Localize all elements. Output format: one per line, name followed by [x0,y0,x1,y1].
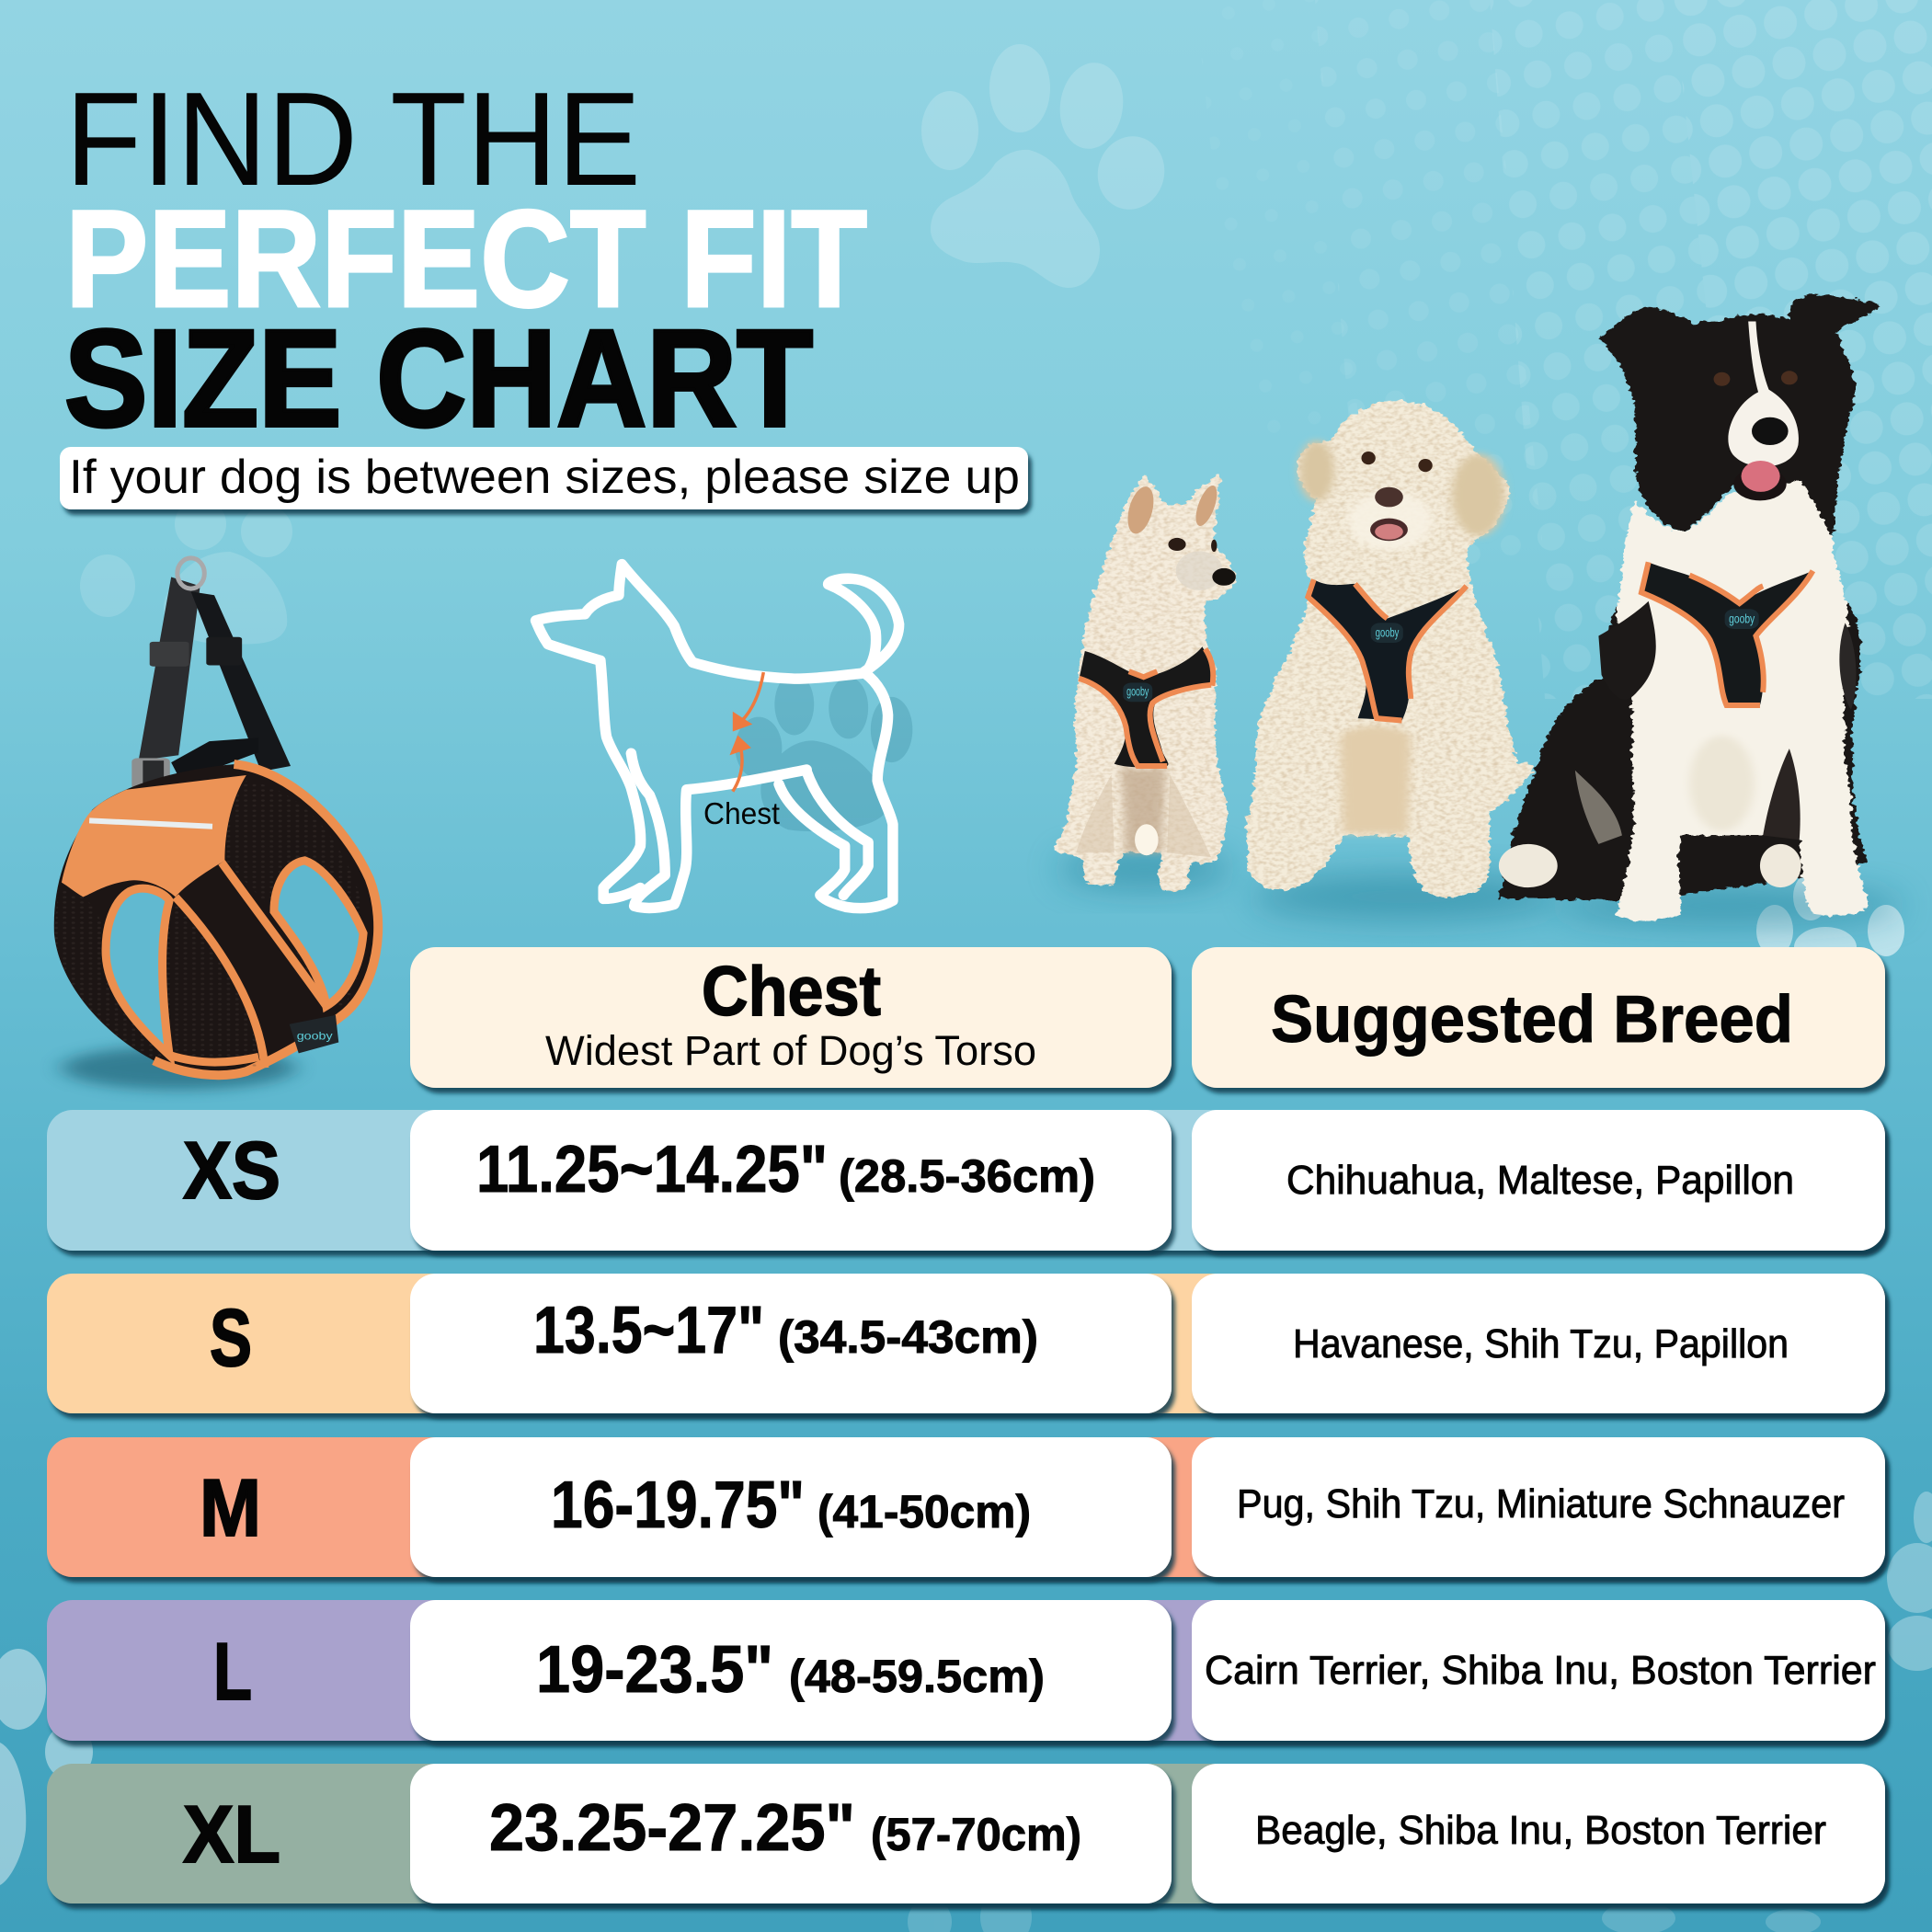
chest diagram label: Chest [703,796,780,830]
row: L [47,1600,1885,1741]
dog silhouette outline [536,565,899,909]
measuring diagram: dog outline [536,565,912,909]
dog: small shiba [1054,474,1237,891]
faint paw inside dog [736,673,912,831]
table header: chest [410,947,1172,1088]
XS size label: XS [183,1125,280,1216]
harness body: gooby [297,1030,333,1042]
S chest cell [410,1274,1172,1413]
subheading: widest part: Widest Part of Dog’s Torso [545,1027,1036,1074]
harness body [54,764,378,1075]
L breed cell [1192,1600,1885,1741]
harness straps [130,558,291,808]
XS chest cell: 11.25~14.25" [476,1133,828,1206]
XL colour band [47,1764,1885,1903]
L chest cell: (48-59.5cm) [789,1651,1045,1702]
row: S [47,1274,1885,1413]
L colour band [47,1600,1885,1741]
chest measurement arrows [729,672,763,792]
dog photos [1054,294,1903,926]
ground shadows [1057,849,1903,926]
XS chest cell [410,1110,1172,1251]
XS chest cell: (28.5-36cm) [839,1150,1095,1202]
paw: bottom left [0,1649,93,1885]
M size label: M [200,1462,261,1553]
XS breed cell [1192,1110,1885,1251]
L chest cell [410,1600,1172,1741]
XL breed cell [1192,1764,1885,1903]
XL chest cell: 23.25-27.25" [489,1791,855,1865]
row: XL [47,1764,1885,1903]
dog: small shiba: gooby [1126,684,1149,699]
heading: chest: Chest [702,953,881,1031]
S chest cell: (34.5-43cm) [778,1311,1038,1363]
dog: border collie: gooby [1729,612,1755,626]
XS colour band [47,1110,1885,1251]
XL chest cell: (57-70cm) [871,1809,1081,1860]
M breed cell: Pug, Shih Tzu, Miniature Schnauzer [1237,1481,1845,1526]
row: XS [47,1110,1885,1251]
paw: top centre [921,44,1172,288]
row: M [47,1437,1885,1577]
S size label: S [210,1292,252,1383]
S chest cell: 13.5~17" [533,1294,764,1367]
sizing note pill: If your dog is between sizes, please size up [69,451,1020,504]
L breed cell: Cairn Terrier, Shiba Inu, Boston Terrier [1205,1648,1876,1693]
M chest cell [410,1437,1172,1577]
title [64,64,867,455]
table header: suggested breed [1192,947,1885,1088]
title line: perfect fit: PERFECT FIT [65,181,867,336]
title line: find the: FIND THE [65,64,641,213]
XL chest cell [410,1764,1172,1903]
XS breed cell: Chihuahua, Maltese, Papillon [1286,1158,1794,1203]
M chest cell: 16-19.75" [551,1469,805,1542]
dog: border collie [1499,294,1880,921]
paw: bottom right under dog [1756,873,1904,967]
table header: suggested breed: Suggested Breed [1271,983,1793,1057]
paw: behind harness [80,498,292,644]
S breed cell: Havanese, Shih Tzu, Papillon [1293,1321,1789,1366]
M breed cell [1192,1437,1885,1577]
M chest cell: (41-50cm) [817,1486,1031,1538]
XL size label: XL [183,1789,280,1880]
background halftone dots [1195,0,1932,699]
harness product photo [54,558,378,1090]
dog: doodle [1246,401,1535,897]
L chest cell: 19-23.5" [536,1633,773,1707]
L size label: L [213,1626,252,1717]
M colour band [47,1437,1885,1577]
paw: right edge [1887,1492,1932,1671]
dog: doodle: gooby [1376,625,1400,640]
XL breed cell: Beagle, Shiba Inu, Boston Terrier [1255,1808,1826,1853]
S colour band [47,1274,1885,1413]
title line: size chart: SIZE CHART [64,301,813,455]
harness ground shadow [62,1046,295,1090]
paw: bottom edge [908,1888,1821,1932]
S breed cell [1192,1274,1885,1413]
